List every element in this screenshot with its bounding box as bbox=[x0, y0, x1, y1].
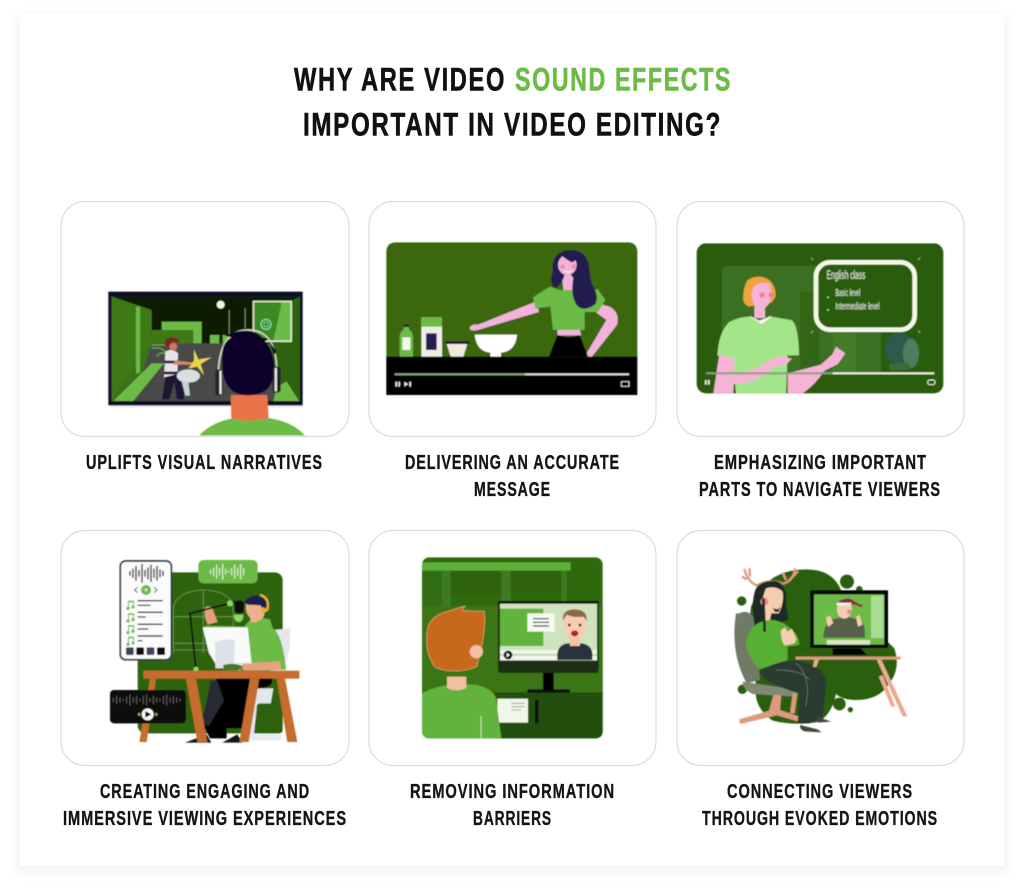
chalkboard with lesson: English class bbox=[827, 268, 865, 282]
panel: removing information barriers bbox=[369, 530, 656, 830]
presenter face bbox=[557, 609, 592, 660]
panel: delivering an accurate message bbox=[369, 202, 656, 501]
office chair bbox=[734, 612, 799, 724]
illustration: gamer watching a screen bbox=[108, 292, 305, 435]
teacher bbox=[713, 277, 845, 393]
chair bbox=[237, 628, 290, 740]
title: SOUND EFFECTS bbox=[515, 62, 732, 98]
kitchen items bbox=[400, 317, 517, 357]
woman bbox=[746, 581, 831, 732]
audio player bbox=[110, 690, 186, 723]
panel: creating engaging and immersive experiences: IMMERSIVE VIEWING EXPERIENCES bbox=[63, 807, 347, 830]
player controls bbox=[705, 372, 935, 385]
chalkboard with lesson bbox=[811, 258, 920, 333]
panel: uplifts visual narratives bbox=[61, 202, 349, 474]
person on screen bbox=[823, 599, 865, 638]
title bbox=[294, 62, 732, 142]
background blob and dots bbox=[737, 569, 897, 724]
illustration: woman in antlers on a video call bbox=[734, 568, 907, 732]
computer monitor with video call bbox=[498, 601, 599, 693]
title: IMPORTANT IN VIDEO EDITING? bbox=[303, 106, 722, 142]
title: WHY ARE VIDEO bbox=[294, 62, 506, 98]
label: EMPHASIZING IMPORTANT bbox=[714, 451, 927, 474]
label: REMOVING INFORMATION bbox=[410, 780, 615, 803]
label: UPLIFTS VISUAL NARRATIVES bbox=[86, 451, 323, 474]
chalkboard with lesson: Intermediate level bbox=[835, 301, 880, 312]
green waveform badge bbox=[198, 560, 258, 583]
woman cooking bbox=[470, 250, 618, 357]
illustration: online teacher video player bbox=[697, 243, 943, 393]
phone with playlist bbox=[120, 561, 171, 660]
illustration: sound editor at desk bbox=[110, 560, 299, 743]
panel: emphasizing important parts bbox=[677, 202, 964, 501]
microphone arm bbox=[190, 600, 244, 672]
illustration: cooking video player bbox=[386, 242, 637, 395]
chalkboard with lesson: Basic level bbox=[835, 288, 860, 299]
label: CREATING ENGAGING AND bbox=[100, 780, 310, 803]
notebook and pen bbox=[497, 699, 538, 723]
panel: removing information barriers: BARRIERS bbox=[473, 807, 552, 830]
viewer seen from behind bbox=[422, 606, 501, 738]
podcaster bbox=[185, 595, 286, 743]
panel: connecting viewers through emotions bbox=[677, 530, 964, 830]
label: CONNECTING VIEWERS bbox=[727, 780, 913, 803]
man with headphones seen from behind bbox=[199, 330, 305, 435]
panel: delivering an accurate message: MESSAGE bbox=[474, 478, 551, 501]
wooden desk bbox=[139, 671, 299, 742]
woman in the game scene bbox=[162, 337, 212, 399]
illustration: viewer watching a video call bbox=[422, 557, 603, 738]
antler headband bbox=[742, 568, 798, 586]
monitor on desk bbox=[795, 590, 907, 716]
label: DELIVERING AN ACCURATE bbox=[405, 451, 620, 474]
computer monitor bbox=[203, 627, 252, 663]
panel: creating engaging and immersive experiences bbox=[61, 530, 349, 830]
